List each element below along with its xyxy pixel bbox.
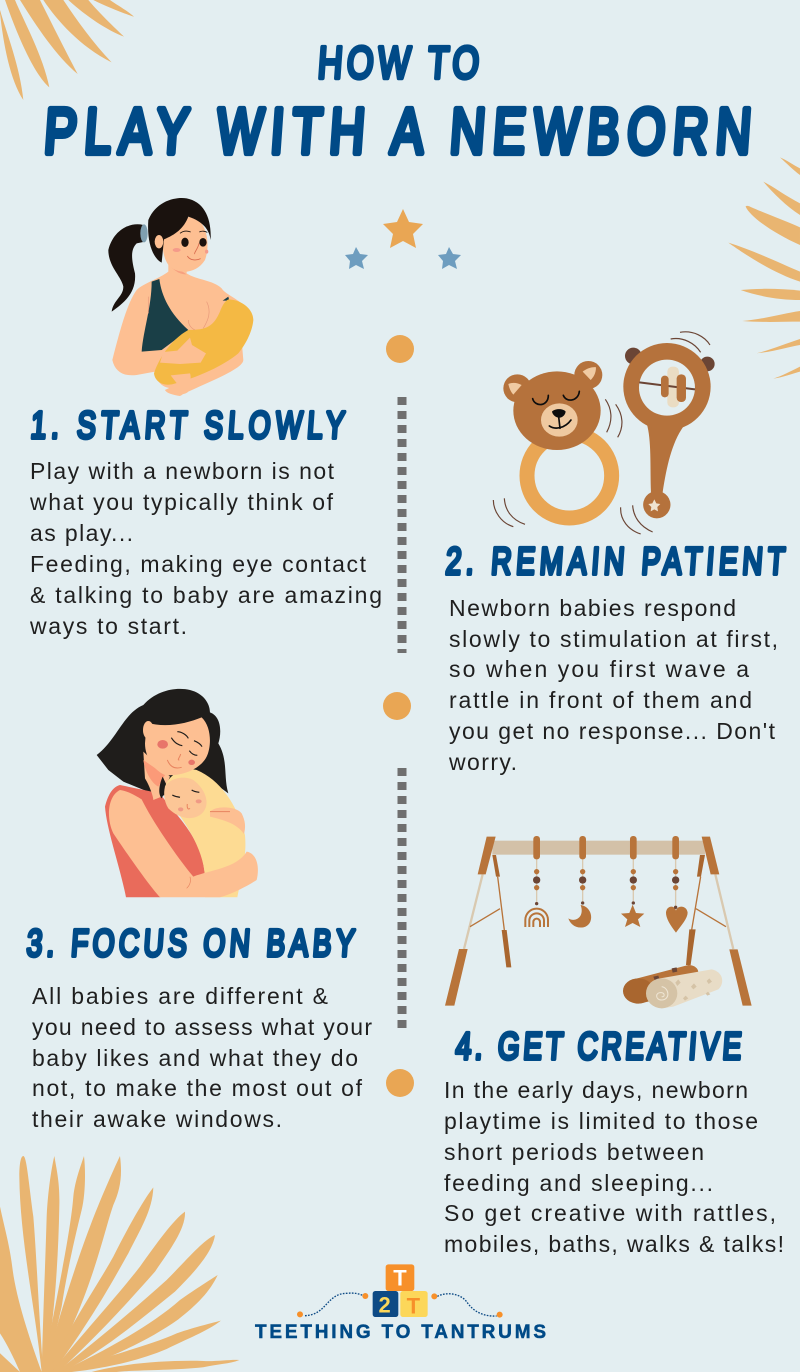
text block: step 4: mobiles, baths, walks & talks!: [444, 1231, 784, 1257]
logo wordmark: TEETHING TO TANTRUMS: [255, 1322, 546, 1343]
text block: step 4: [444, 1077, 784, 1257]
timeline: [383, 335, 414, 1097]
heading: step 1: 1. START SLOWLY: [29, 405, 346, 447]
title line: play with a newborn: PLAY WITH A NEWBORN: [42, 96, 754, 168]
palm leaf: top left: [0, 0, 134, 100]
text block: step 1: & talking to baby are amazing: [30, 582, 382, 608]
text block: step 2: you get no response... Don't: [449, 718, 776, 744]
illustration: bear and rattle toys: [493, 332, 715, 534]
text block: step 3: baby likes and what they do: [32, 1045, 358, 1071]
illustration: mother feeding baby: [108, 198, 253, 396]
text block: step 1: [29, 458, 382, 639]
text block: step 2: rattle in front of them and: [449, 687, 752, 713]
heading: step 2: 2. REMAIN PATIENT: [444, 541, 786, 583]
logo icon: blocks: [297, 1264, 503, 1319]
text block: step 1: Feeding, making eye contact: [30, 551, 367, 577]
star large: [383, 209, 423, 248]
text block: step 1: Play with a newborn is not: [30, 458, 335, 484]
logo icon: blocks: T: [393, 1266, 407, 1291]
text block: step 2: so when you first wave a: [449, 656, 749, 682]
dashed line lower: [398, 768, 406, 1028]
text block: step 3: not, to make the most out of: [32, 1075, 363, 1101]
illustration: mother hugging baby: [97, 689, 258, 897]
text block: step 2: slowly to stimulation at first,: [449, 626, 778, 652]
text block: step 2: worry.: [448, 749, 517, 775]
text block: step 4: playtime is limited to those: [444, 1108, 758, 1134]
palm leaf: right: [728, 157, 800, 379]
title line: how to: HOW TO: [316, 39, 481, 88]
text block: step 2: Newborn babies respond: [449, 595, 736, 621]
heading: step 3: 3. FOCUS ON BABY: [25, 923, 356, 965]
text block: step 3: you need to assess what your: [32, 1014, 372, 1040]
text block: step 1: as play...: [30, 520, 133, 546]
timeline dot 2: [383, 692, 411, 720]
text block: step 4: short periods between: [444, 1139, 704, 1165]
palm leaf: bottom left: [0, 1156, 239, 1372]
text block: step 3: their awake windows.: [32, 1106, 282, 1132]
timeline dot 1: [386, 335, 414, 363]
stars: [345, 209, 461, 269]
text block: step 2: [448, 595, 778, 775]
text block: step 3: All babies are different &: [32, 983, 328, 1009]
text block: step 4: So get creative with rattles,: [444, 1200, 776, 1226]
star left: [345, 247, 368, 269]
logo: teething to tantrums: [255, 1264, 546, 1343]
text block: step 4: feeding and sleeping...: [444, 1170, 713, 1196]
heading: step 4: 4. GET CREATIVE: [454, 1026, 743, 1068]
illustration: baby play gym: [445, 836, 752, 1008]
star right: [438, 247, 461, 269]
title: [42, 39, 754, 168]
timeline dot 3: [386, 1069, 414, 1097]
text block: step 3: [32, 983, 372, 1132]
text block: step 1: ways to start.: [29, 613, 187, 639]
dashed line upper: [398, 397, 406, 653]
text block: step 4: In the early days, newborn: [444, 1077, 748, 1103]
logo icon: blocks: T: [407, 1294, 421, 1319]
text block: step 1: what you typically think of: [29, 489, 334, 515]
logo icon: blocks: 2: [379, 1293, 391, 1318]
